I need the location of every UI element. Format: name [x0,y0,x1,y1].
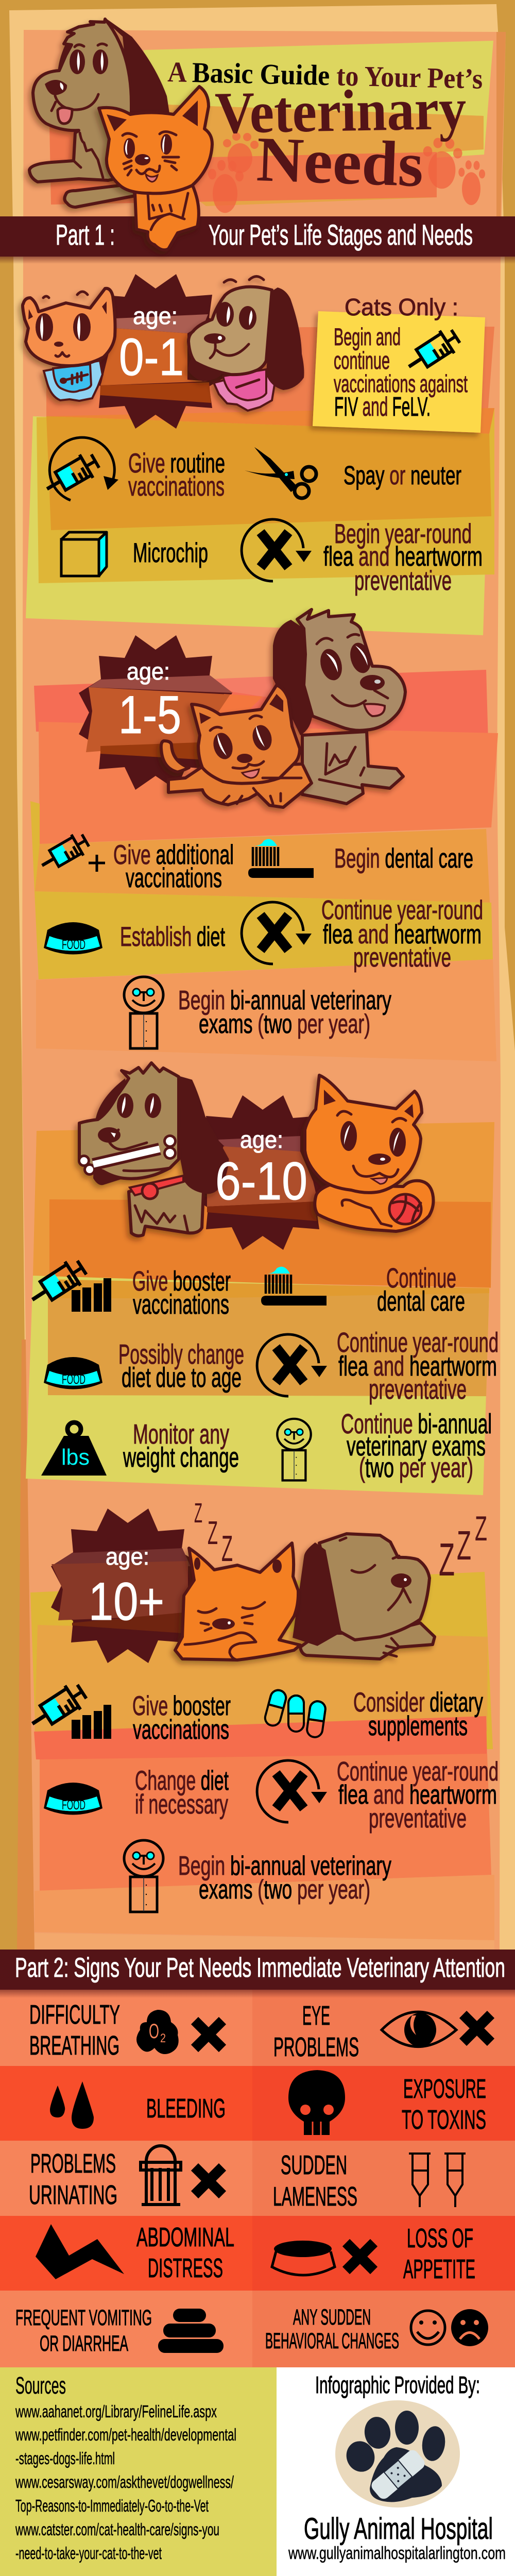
item: spay or neuter: Spay or neuter [344,461,461,490]
panel: age 6-10 background [26,1122,494,1495]
sign: problems urinating: PROBLEMS [30,2149,116,2179]
age badge: 10+: 10+ [89,1572,164,1632]
age badge: 0-1 [79,274,232,429]
sign: abdominal distress: DISTRESS [148,2253,223,2283]
panel: age 10+ background [30,1572,494,1953]
title [167,56,483,200]
banner: Part 2 [0,1950,515,1998]
item: give additional vaccinations: Give additional [113,840,234,870]
item: monitor weight change: weight change [123,1442,239,1473]
illustration: cat with yarn [305,1075,433,1231]
age badge: 10+: age: [106,1543,149,1570]
item: give booster vaccinations (6-10): vaccinations [133,1289,229,1320]
sign: frequent vomiting or diarrhea: FREQUENT VOMITING [15,2306,152,2330]
age label: 6-10 [215,1126,307,1211]
item: continue bi-annual exams [277,1409,492,1483]
sign: difficulty breathing: 2 [160,2031,166,2045]
item: begin dental care: Begin dental care [334,843,473,874]
item: continue flea and heartworm (1-5): preventative [353,943,451,973]
sign: behavioral changes: BEHAVIORAL CHANGES [265,2329,399,2353]
banner: Part 1 [0,216,515,264]
item: give routine vaccinations: Give routine [128,448,225,479]
sign: frequent vomiting or diarrhea [15,2306,224,2356]
panel: sources: -stages-dogs-life.html [15,2449,115,2468]
item: monitor weight change: Monitor any [133,1419,229,1450]
item: spay or neuter [245,447,461,498]
item: change diet if necessary [44,1766,229,1820]
illustration: kitten with bib [23,289,115,401]
age badge: 10+ [51,1509,204,1663]
panel: age 1-5 background [30,670,498,1061]
panel: sources: www.catster.com/cat-health-care/signs-you [15,2520,219,2539]
panel: provided by [277,2367,515,2576]
banner: Part 1: Part 1 : [56,218,115,251]
text: sleeping z's: Z [194,1498,202,1529]
age badge: 1-5 [79,635,263,790]
item: begin flea and heartworm [242,519,483,596]
item: bi-annual exams (1-5): Begin bi-annual veterinary [178,986,391,1015]
title: Needs [255,124,425,200]
item: give booster vaccinations (6-10): Give booster [132,1266,231,1297]
sign: problems urinating [29,2146,222,2210]
item: continue flea and heartworm (10+) [257,1757,499,1834]
sign: eye problems: EYE [302,2001,330,2031]
panel: part 2 grid [0,1990,515,2367]
item: consider dietary supplements: Consider dietary [353,1687,483,1718]
item: monitor weight change: lbs [61,1445,90,1470]
item: continue flea and heartworm (10+): preventative [369,1804,467,1834]
item: continue dental care: Continue [386,1263,456,1294]
sign: frequent vomiting or diarrhea: OR DIARRHEA [40,2331,128,2356]
sticky note: cats only [313,294,485,433]
illustration: header cat [99,87,212,250]
icons: header paw prints [208,132,485,213]
sign: problems urinating: URINATING [29,2180,117,2210]
sticky note: cats only: Cats Only : [345,294,458,320]
sign: bleeding: BLEEDING [146,2094,226,2124]
item: continue dental care: dental care [377,1286,465,1317]
text: sleeping z's [194,1498,487,1586]
icon: syringe [402,325,463,378]
item: continue flea and heartworm (1-5) [242,895,483,973]
sign: sudden lameness [273,2150,466,2212]
sign: difficulty breathing: O [149,2020,159,2043]
panel: sources: www.petfinder.com/pet-health/developmental [15,2425,236,2444]
item: give additional vaccinations [36,830,234,893]
text: sleeping z's: Z [208,1514,218,1551]
illustration: sleeping cat [175,1543,300,1660]
illustration: sleeping dog [294,1534,435,1659]
sign: eye problems [273,2001,491,2062]
age badge: 1-5: 1-5 [118,685,181,745]
item: bi-annual exams (10+): Begin bi-annual veterinary [178,1851,391,1881]
age badge: 0-1: age: [133,302,178,329]
item: establish diet: Establish diet [120,922,225,952]
item: give booster vaccinations (10+): vaccinations [133,1715,229,1745]
item: possibly change diet: diet due to age [122,1362,242,1393]
item: bi-annual exams (1-5): exams (two per year) [199,1009,370,1039]
panel: sources: Top-Reasons-to-Immediately-Go-to-the-Vet [15,2496,209,2515]
illustration: adult dog [273,609,405,804]
item: change diet if necessary: FOOD [62,1797,85,1812]
panel: sources [0,2367,277,2576]
item: give booster vaccinations (6-10) [25,1256,231,1320]
item: possibly change diet [44,1339,244,1393]
illustration: adult dog with bone [78,1063,228,1236]
item: continue bi-annual exams: (two per year) [359,1452,473,1483]
panel: sources: Sources [15,2372,66,2399]
item: begin flea and heartworm: preventative [354,566,452,596]
text: sleeping z's: Z [439,1534,455,1586]
sign: abdominal distress [36,2223,234,2283]
item: possibly change diet: FOOD [62,1371,85,1387]
sign: abdominal distress: ABDOMINAL [136,2223,234,2252]
item: possibly change diet: Possibly change [118,1339,244,1370]
item: establish diet [44,922,225,954]
sign: difficulty breathing [29,2000,222,2061]
sticky note: cats only: continue [334,347,390,374]
title: A Basic Guide to Your Pet’s [167,56,483,95]
age label: 6-10: 6-10 [215,1151,307,1211]
item: give booster vaccinations (10+) [25,1680,231,1745]
panel: header background bands [49,41,493,206]
item: bi-annual exams (1-5) [124,977,391,1048]
item: continue flea and heartworm (1-5): flea and heartworm [323,920,482,950]
sign: behavioral changes: ANY SUDDEN [293,2305,371,2330]
text: sleeping z's: Z [221,1529,233,1569]
item: change diet if necessary: if necessary [135,1789,228,1820]
text: sleeping z's: Z [475,1509,487,1548]
item: change diet if necessary: Change diet [135,1766,229,1796]
sign: behavioral changes [265,2305,488,2353]
panel: sources: -need-to-take-your-cat-to-the-vet [15,2544,162,2563]
item: microchip: Microchip [133,538,208,568]
sign: loss of appetite [272,2224,475,2284]
panel: age 0-1 background [26,327,494,635]
item: establish diet: FOOD [62,937,85,952]
sign: sudden lameness: SUDDEN [281,2150,347,2180]
age badge: 0-1: 0-1 [119,328,184,386]
sign: bleeding [50,2081,226,2129]
title: Veterinary [214,76,467,146]
age badge: 6-10 [186,1095,339,1250]
illustration: adult cat [161,685,312,807]
text: sleeping z's: Z [457,1522,471,1568]
panel: sources: www.cesarsway.com/askthevet/dogwellness/ [15,2472,234,2492]
sign: difficulty breathing: BREATHING [29,2031,119,2061]
item: give booster vaccinations (10+): Give booster [132,1691,231,1721]
item: give routine vaccinations: vaccinations [128,471,225,502]
item: monitor weight change [41,1419,239,1476]
item: consider dietary supplements [263,1687,483,1741]
age badge: 1-5: age: [127,658,170,685]
item: bi-annual exams (10+): exams (two per year) [199,1875,370,1905]
item: give routine vaccinations [40,437,225,502]
item: give additional vaccinations: vaccinations [126,863,222,893]
age label: 6-10: age: [240,1126,283,1153]
sign: eye problems: PROBLEMS [273,2032,359,2062]
sign: exposure to toxins [288,2070,486,2135]
logo: paw with bandage [335,2400,460,2507]
sticky note: cats only: Begin and [334,323,401,350]
panel: sources: www.aahanet.org/Library/FelineLife.aspx [15,2402,217,2421]
item: continue dental care [261,1263,465,1317]
sticky note: cats only: FIV and FeLV. [334,392,431,422]
item: microchip [61,532,208,576]
illustration: puppy with bib [187,276,304,411]
item: begin dental care [248,839,473,878]
sign: difficulty breathing: DIFFICULTY [29,2000,120,2030]
item: bi-annual exams (10+) [124,1840,391,1912]
sign: sudden lameness: LAMENESS [273,2182,357,2212]
illustration: header dog [29,19,170,207]
item: continue flea and heartworm (6-10) [257,1327,499,1405]
